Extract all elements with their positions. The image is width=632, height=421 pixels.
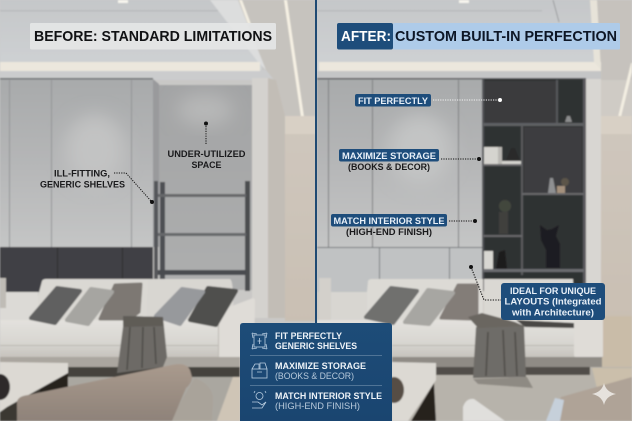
- callout: match interior style: MATCH INTERIOR STYLE: [334, 216, 445, 227]
- text: match interior style: (HIGH-END FINISH): [275, 401, 360, 411]
- text: maximize storage: MAXIMIZE STORAGE: [275, 361, 366, 371]
- sofa seat: [0, 320, 252, 357]
- throw blanket: [117, 316, 167, 373]
- text: maximize storage: (BOOKS & DECOR): [275, 371, 354, 381]
- ceiling tray: [0, 0, 262, 80]
- throw blanket: [516, 320, 574, 328]
- text: fit perfectly: FIT PERFECTLY: [275, 331, 343, 341]
- text: match interior style: [275, 391, 382, 411]
- icon: match interior style: [252, 391, 266, 408]
- coffee table: [411, 383, 436, 421]
- dark lower band: [0, 247, 153, 292]
- panel: benefits summary: [240, 323, 392, 421]
- pillows: [441, 285, 477, 319]
- callout: under-utilized space: UNDER-UTILIZED: [168, 149, 246, 160]
- heading: after: [337, 23, 620, 50]
- armchair foreground: [170, 378, 213, 421]
- panel: before photo: [0, 0, 316, 421]
- callout: ill-fitting generic shelves: [40, 168, 154, 204]
- armchair foreground: [463, 399, 505, 421]
- callout: match interior style: (HIGH-END FINISH): [346, 227, 432, 238]
- icon: fit perfectly: [252, 333, 267, 349]
- text: fit perfectly: GENERIC SHELVES: [275, 341, 357, 351]
- text: match interior style: MATCH INTERIOR STYLE: [275, 391, 382, 401]
- callout: ideal for unique layouts: [469, 265, 605, 320]
- coffee table: [40, 373, 68, 395]
- callout: match interior style: [331, 214, 477, 238]
- callout: under-utilized space: [168, 122, 246, 171]
- pillar and far wall: [252, 78, 270, 318]
- callout: maximize storage: (BOOKS & DECOR): [348, 162, 430, 173]
- callout: maximize storage: MAXIMIZE STORAGE: [342, 151, 437, 162]
- sofa back: [37, 279, 148, 325]
- sofa seat: [317, 320, 603, 357]
- text: maximize storage: [275, 361, 366, 381]
- icon: maximize storage: [252, 363, 267, 378]
- callout: ill-fitting generic shelves: GENERIC SHELVES: [40, 180, 126, 190]
- callout: fit perfectly: FIT PERFECTLY: [358, 96, 429, 107]
- wall panels: [317, 79, 482, 247]
- heading: before: [30, 23, 276, 50]
- generic shelf unit: [154, 181, 158, 291]
- callout: maximize storage: [339, 149, 481, 173]
- wall panels: [0, 79, 153, 247]
- built-in shelf: [482, 79, 586, 291]
- icon: sparkle watermark: [592, 383, 616, 405]
- text: fit perfectly: [275, 331, 357, 351]
- shelf decor: [484, 147, 498, 164]
- panel: after photo: [317, 0, 632, 421]
- callout: ill-fitting generic shelves: ILL-FITTING,: [54, 168, 110, 180]
- callout: ideal for unique layouts: with Architecture): [511, 307, 594, 318]
- callout: fit perfectly: [355, 94, 502, 107]
- heading: after: CUSTOM BUILT-IN PERFECTION: [395, 28, 617, 45]
- callout: under-utilized space: SPACE: [192, 160, 222, 171]
- pillar and far wall: [586, 79, 601, 319]
- callout: ideal for unique layouts: IDEAL FOR UNIQUE: [510, 286, 597, 297]
- sofa back: [364, 279, 483, 325]
- heading: after: AFTER:: [341, 28, 391, 45]
- center divider: [315, 0, 317, 421]
- pillows: [31, 288, 80, 323]
- callout: ideal for unique layouts: LAYOUTS (Integrated: [504, 297, 602, 308]
- heading: before: BEFORE: STANDARD LIMITATIONS: [34, 28, 272, 45]
